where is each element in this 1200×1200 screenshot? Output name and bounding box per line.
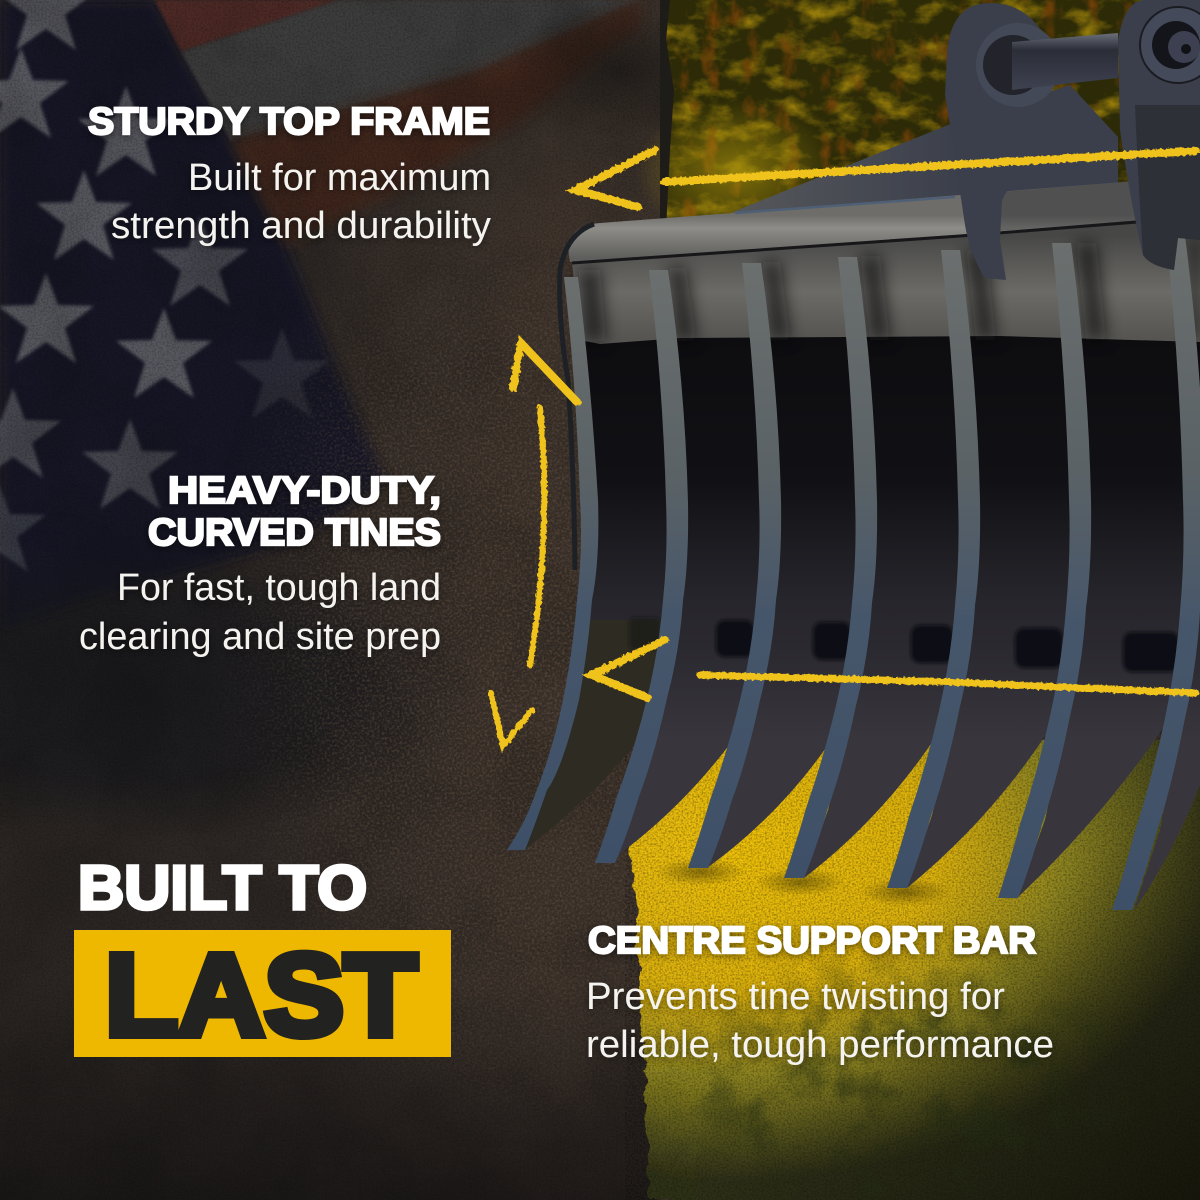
callout: sturdy top frame: Built for maximum [188,157,491,199]
callout: centre support bar [586,920,1054,1066]
mounting plate one with washer [945,3,1060,280]
outer tine [507,277,598,850]
arrow: top frame [576,150,1196,207]
background: olive grunge top right [635,0,1200,260]
rib on top of bar [735,197,955,213]
callout: curved tines: CURVED TINES [148,512,441,554]
top bar [569,176,1200,262]
callout: sturdy top frame: STURDY TOP FRAME [88,101,490,143]
callout: curved tines: For fast, tough land [117,567,441,609]
callout: sturdy top frame [88,101,491,247]
callout: curved tines: HEAVY-DUTY, [168,470,441,512]
headline line two: LAST [105,930,417,1060]
callout: curved tines: clearing and site prep [79,616,441,658]
arrow: centre support bar [592,640,1196,698]
background: yellow grunge patch [625,720,1200,1200]
lower fins [524,620,1200,910]
rake attachment [507,0,1200,910]
callout: curved tines [79,470,441,658]
background: dark shadow areas [0,0,730,1200]
headline box [74,930,451,1057]
callout: centre support bar: Prevents tine twisting for [586,976,1005,1018]
bar shade right side [1000,176,1200,231]
gusset plate [733,85,1118,222]
arrow: curved tines, double headed [491,343,577,746]
outer edge of side plate [560,224,594,570]
callout: sturdy top frame: strength and durability [111,205,491,247]
callout: centre support bar: reliable, tough performance [586,1024,1054,1066]
mounting plate two with boss [1118,0,1200,270]
callout: centre support bar: CENTRE SUPPORT BAR [588,920,1036,962]
upper panel under bar [572,216,1200,344]
tines [595,236,1200,910]
bar underside line [572,217,1200,263]
rake inner cavity [575,330,1200,705]
headline line one: BUILT TO [78,854,367,923]
tine shadows on panel [578,238,1200,344]
connecting pin [1012,33,1118,90]
headline: built to last [74,854,451,1060]
background: American flag [0,0,640,630]
centre support bar bolts [629,617,1179,672]
